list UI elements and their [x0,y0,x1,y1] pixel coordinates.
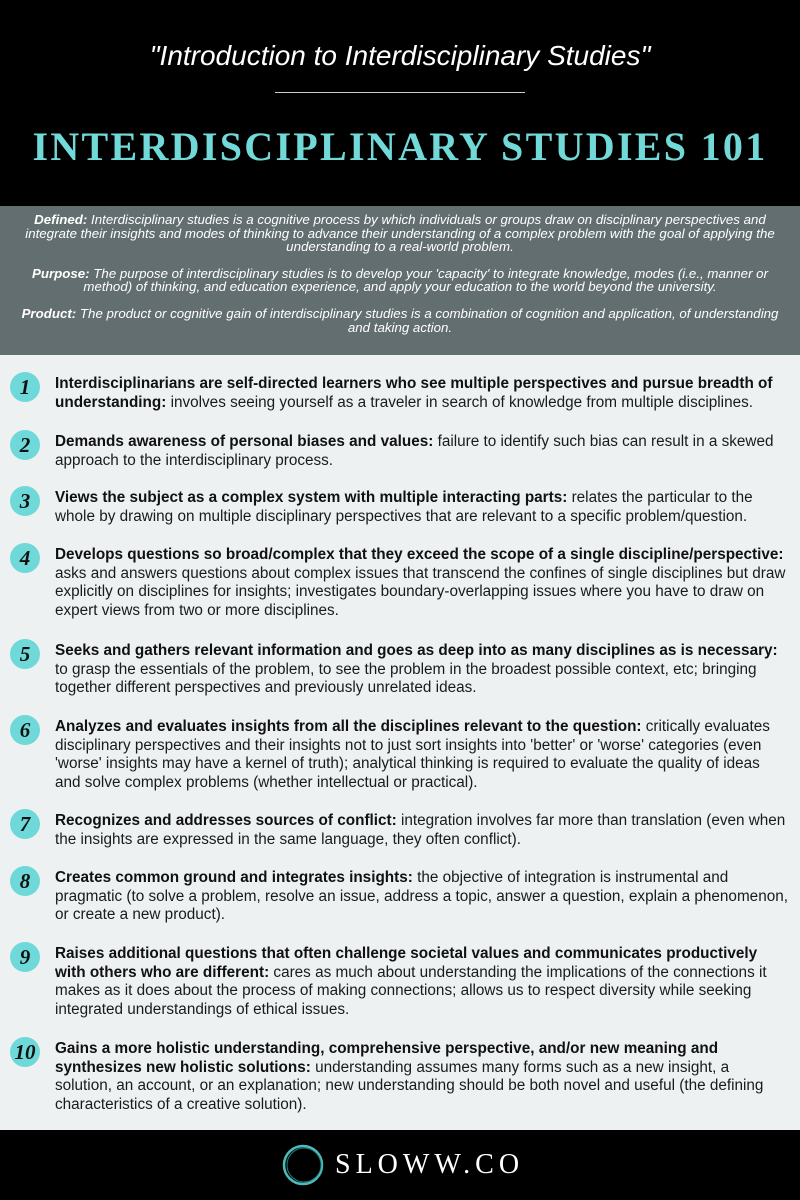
item 5: Seeks and gathers relevant information and goes as deep into as many disciplines as is necessary: to grasp the essentials of the problem, to see the problem in the broadest possible context, etc; bringing together different perspectives and previously unrelated ideas. [55,642,778,696]
text: 7 [20,812,30,836]
text: 4 [20,546,30,570]
header [0,0,800,206]
icon: ring [282,1144,324,1186]
text: 9 [20,945,30,969]
subtitle: "Introduction to Interdisciplinary Studies" [150,40,650,71]
item 10: Gains a more holistic understanding, comprehensive perspective, and/or new meaning and synthesizes new holistic solutions: understanding assumes many forms such as a new insight, a solution, an account, or an explanation; new understanding should be both novel and useful (the defining characteristics of a creative solution). [55,1040,763,1113]
item 8: Creates common ground and integrates insights: the objective of integration is instrumental and pragmatic (to solve a problem, resolve an issue, address a topic, answer a question, explain a phenomenon, or create a new product). [55,869,788,923]
item 4: Develops questions so broad/complex that they exceed the scope of a single discipline/perspective: asks and answers questions about complex issues that transcend the confines of single disciplines but draw explicitly on disciplines for insights; investigates boundary-overlapping issues where you have to draw on expert views from two or more disciplines. [55,546,785,619]
item 1: Interdisciplinarians are self-directed learners who see multiple perspectives and pursue breadth of understanding: involves seeing yourself as a traveler in search of knowledge from multiple disciplines. [55,375,772,411]
footer [0,1130,800,1200]
item 6: Analyzes and evaluates insights from all the disciplines relevant to the question: critically evaluates disciplinary perspectives and their insights not to just sort insights into 'better' or 'worse' categories (even 'worse' insights may have a kernel of truth); analytical thinking is required to evaluate the quality of ideas and solve complex problems (whether intellectual or practical). [55,718,770,791]
text: 3 [20,489,30,513]
item 3: Views the subject as a complex system with multiple interacting parts: relates the particular to the whole by drawing on multiple disciplinary perspectives that are relevant to a specific problem/question. [55,489,753,525]
panel: definitions: Defined: Interdisciplinary studies is a cognitive process by which individuals or groups draw on disciplinary perspectives and integrate their insights and modes of thinking to advance their understanding of a complex problem with the goal of applying the understanding to a real-world problem. [25,212,775,254]
logo [282,1144,524,1186]
panel: definitions: Purpose: The purpose of interdisciplinary studies is to develop your 'capacity' to integrate knowledge, modes (i.e., manner or method) of thinking, and education experience, and apply your education to the world beyond the university. [32,266,768,294]
panel: definitions [0,206,800,355]
text: 5 [20,642,30,666]
text: 6 [20,718,30,742]
text: 2 [20,433,30,457]
brand name: SLOWW.CO [335,1149,524,1180]
item 7: Recognizes and addresses sources of conflict: integration involves far more than translation (even when the insights are expressed in the same language, they often conflict). [55,812,785,848]
text: 1 [20,375,30,399]
item 2: Demands awareness of personal biases and values: failure to identify such bias can result in a skewed approach to the interdisciplinary process. [55,433,773,469]
text: 10 [14,1040,36,1064]
text: 8 [20,869,30,893]
panel: definitions: Product: The product or cognitive gain of interdisciplinary studies is a combination of cognition and application, of understanding and taking action. [22,306,778,335]
title: INTERDISCIPLINARY STUDIES 101 [32,124,768,169]
item 9: Raises additional questions that often challenge societal values and communicates productively with others who are different: cares as much about understanding the implications of the connections it makes as it does about the process of making connections; allows us to respect diversity while seeking integrated understandings of ethical issues. [55,945,767,1018]
